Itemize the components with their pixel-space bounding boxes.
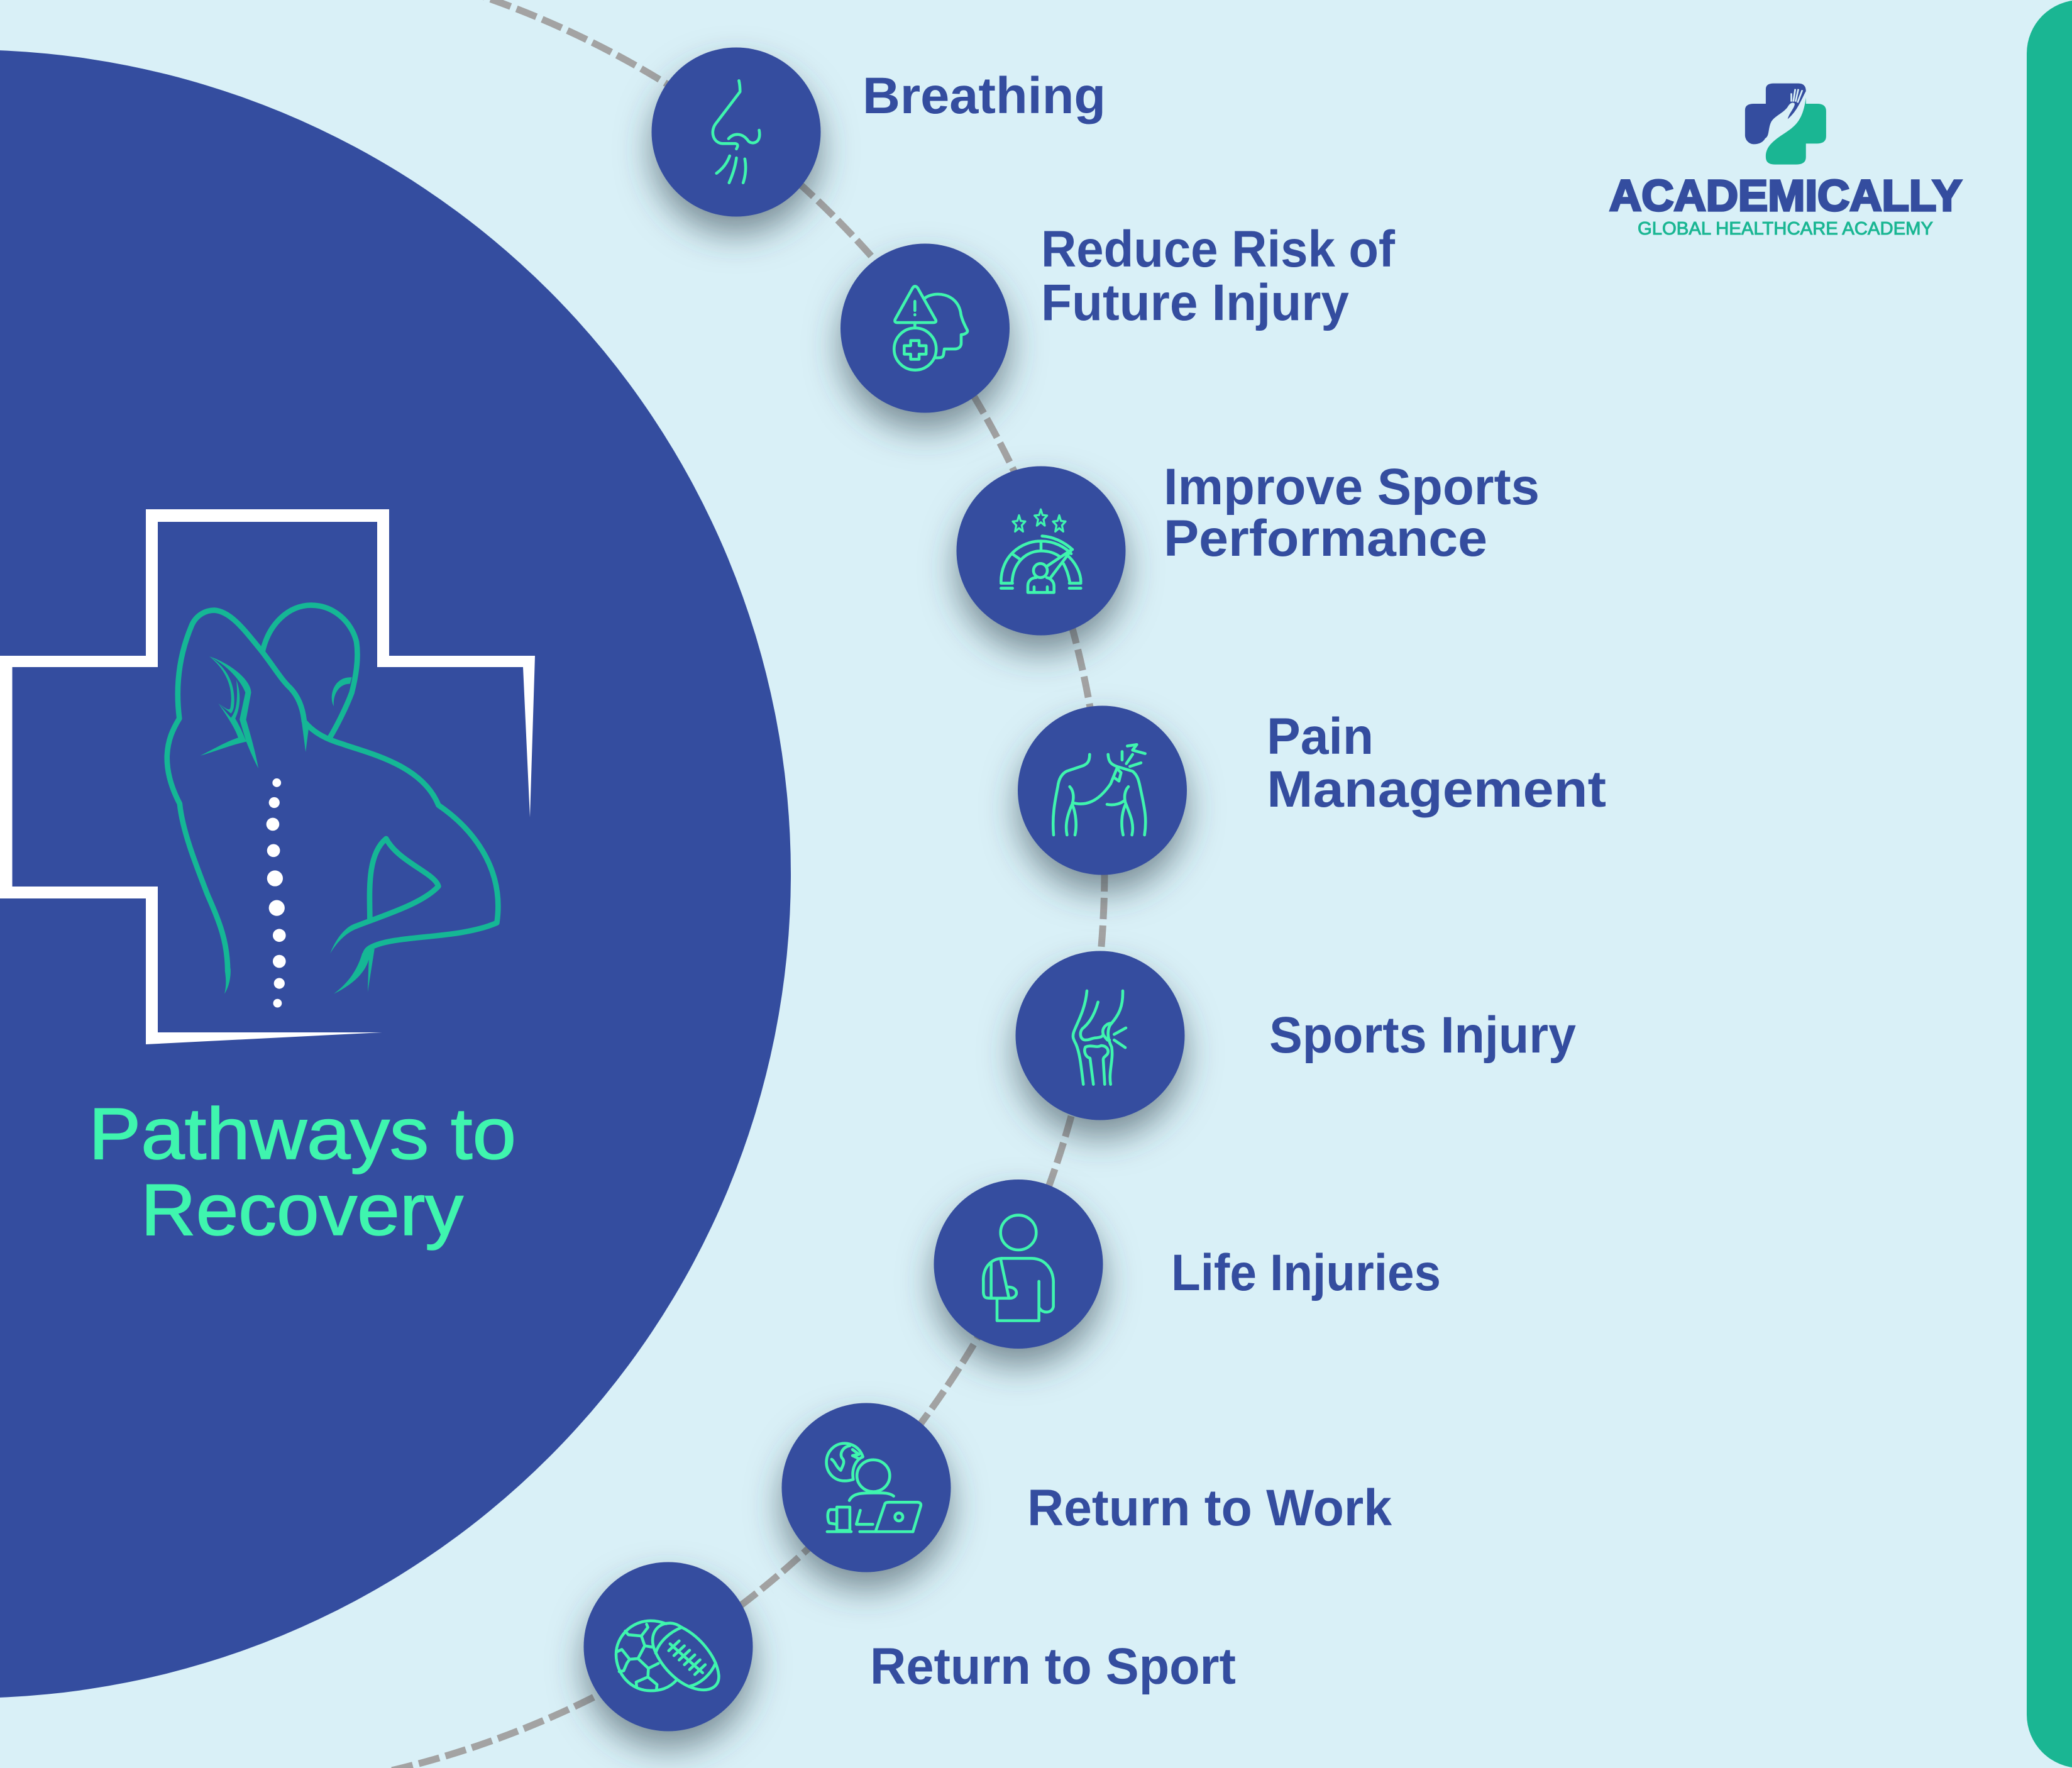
node: breathing <box>651 48 821 216</box>
logo icon: cross with hand <box>1745 84 1826 165</box>
label: return to sport: Return to Sport <box>870 1638 1236 1695</box>
icon: gauge with stars <box>1001 509 1081 592</box>
title: Recovery <box>141 1169 463 1251</box>
label: pain management: Pain <box>1267 708 1374 765</box>
label: reduce risk of future injury <box>1041 221 1396 331</box>
logo tagline: GLOBAL HEALTHCARE ACADEMY <box>1638 219 1933 239</box>
dashed pathway arc <box>0 0 1105 1768</box>
label: breathing: Breathing <box>862 67 1106 124</box>
spine dots <box>267 778 286 1008</box>
icon: knee joint <box>1073 991 1126 1085</box>
label: improve sports performance <box>1164 458 1540 567</box>
label: reduce risk of future injury: Reduce Risk of <box>1041 221 1396 278</box>
title <box>89 1093 516 1251</box>
label: pain management <box>1267 708 1606 818</box>
label: life injuries: Life Injuries <box>1171 1244 1441 1301</box>
title: Pathways to <box>89 1093 516 1174</box>
icon: soccer ball and football <box>616 1621 719 1691</box>
label: reduce risk of future injury: Future Injury <box>1041 274 1349 331</box>
node: improve sports performance <box>957 467 1125 635</box>
logo wordmark: ACADEMICALLY <box>1609 171 1962 220</box>
icon: person with arm sling <box>983 1215 1054 1320</box>
label: improve sports performance: Performance <box>1164 510 1487 567</box>
node: sports injury <box>1016 951 1184 1120</box>
node: return to sport <box>583 1562 753 1732</box>
label: return to work: Return to Work <box>1027 1479 1392 1537</box>
label: improve sports performance: Improve Sports <box>1164 458 1540 516</box>
icon: shoulder pain <box>1053 744 1145 835</box>
node: return to work <box>782 1403 951 1572</box>
label: sports injury: Sports Injury <box>1269 1007 1576 1064</box>
large blue semicircle panel <box>0 50 791 1698</box>
label: pain management: Management <box>1267 761 1606 818</box>
right green bar <box>2027 0 2072 1768</box>
node: life injuries <box>934 1180 1103 1349</box>
icon: warning head <box>894 286 967 370</box>
back pain body illustration <box>167 605 498 994</box>
node: reduce risk <box>840 244 1010 412</box>
node: pain management <box>1018 705 1187 875</box>
icon: remote worker with globe and laptop <box>827 1444 921 1532</box>
logo <box>1609 84 1962 239</box>
medical cross outline <box>0 509 535 1044</box>
icon: nose <box>713 80 759 183</box>
